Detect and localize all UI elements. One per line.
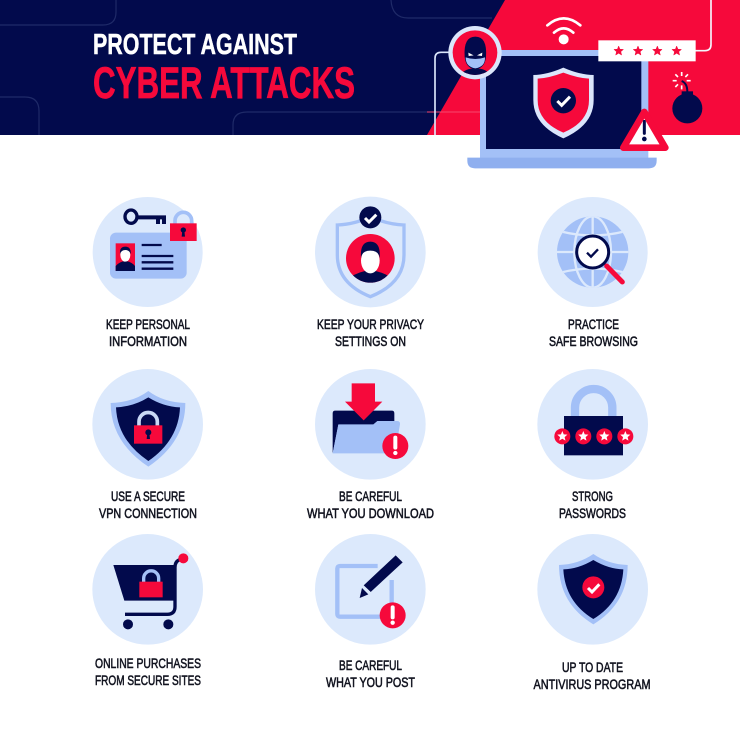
label: KEEP YOUR PRIVACY [317, 317, 424, 332]
icon: shield with check [537, 534, 648, 645]
title [93, 29, 355, 108]
icon: id card with key and lock [93, 197, 203, 307]
icon: pencil on square [315, 534, 426, 645]
label: UP TO DATE [562, 660, 623, 675]
icon: hacker [448, 26, 502, 79]
label: PRACTICE [568, 317, 619, 332]
panel: keep personal information [93, 197, 203, 349]
label [106, 317, 190, 349]
label [326, 658, 415, 690]
label: ONLINE PURCHASES [95, 656, 201, 671]
laptop base [467, 158, 657, 168]
label: WHAT YOU POST [326, 675, 415, 690]
password box [598, 40, 696, 61]
title: PROTECT AGAINST [93, 29, 297, 61]
label [549, 317, 638, 349]
icon: bomb [672, 72, 702, 123]
label: SAFE BROWSING [549, 334, 638, 349]
label [95, 656, 201, 688]
panel: up to date antivirus program [534, 534, 650, 692]
header banner [0, 0, 740, 135]
icon: shield with person [315, 197, 426, 307]
panel: strong passwords [537, 369, 648, 521]
icon: shield with padlock [92, 369, 203, 480]
label [534, 660, 650, 692]
label: BE CAREFUL [339, 489, 402, 504]
panel: use a secure vpn connection [92, 369, 203, 521]
label: VPN CONNECTION [99, 506, 197, 521]
label: STRONG [572, 489, 613, 504]
label [317, 317, 424, 349]
icon: globe and magnifier [538, 197, 648, 307]
label [307, 489, 434, 521]
label: WHAT YOU DOWNLOAD [307, 506, 434, 521]
laptop screen [480, 50, 648, 158]
label: FROM SECURE SITES [95, 673, 201, 688]
panel: online purchases from secure sites [92, 534, 203, 688]
label: ANTIVIRUS PROGRAM [534, 677, 650, 692]
panel: be careful what you post [315, 534, 426, 690]
icon: shopping cart with padlock [92, 534, 203, 645]
panel: keep your privacy settings on [315, 197, 426, 349]
icon: wifi [547, 18, 580, 44]
label: KEEP PERSONAL [106, 317, 190, 332]
label: INFORMATION [109, 334, 187, 349]
panel: practice safe browsing [538, 197, 648, 349]
icon: padlock with password dots [537, 369, 648, 480]
title: CYBER ATTACKS [93, 59, 355, 108]
label [559, 489, 626, 521]
label [99, 489, 197, 521]
label: BE CAREFUL [339, 658, 402, 673]
panel: be careful what you download [307, 369, 434, 521]
label: PASSWORDS [559, 506, 626, 521]
laptop illustration [435, 0, 711, 168]
shield with check [533, 68, 594, 138]
label: USE A SECURE [111, 489, 185, 504]
icon: warning triangle [623, 112, 665, 148]
icon: folder with download arrow [315, 369, 426, 480]
label: SETTINGS ON [335, 334, 406, 349]
